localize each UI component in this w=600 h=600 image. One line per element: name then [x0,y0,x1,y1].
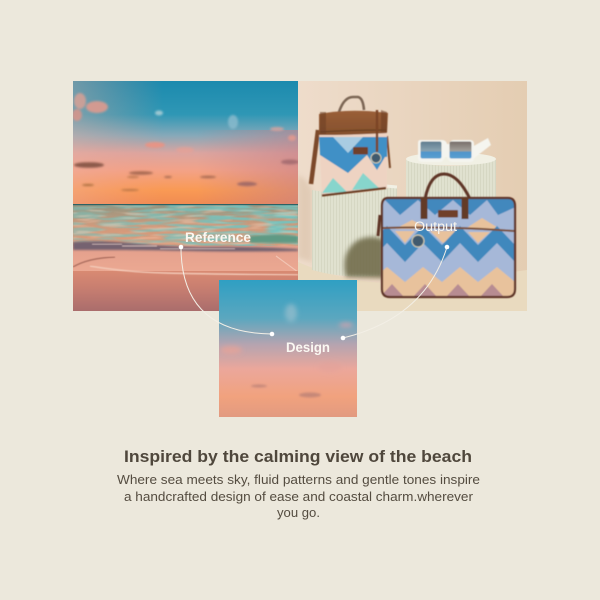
pedestal: right [406,154,496,197]
panel: design swatch [219,280,357,417]
connector: reference to design [179,245,274,336]
panel: reference beach photo [72,81,299,311]
label: Reference: Reference [185,230,251,245]
pedestal: left [312,186,397,278]
panel: output product photo [298,81,533,311]
label: Output: Output [414,219,457,234]
text block: description: you go. [277,506,320,520]
text block: description: Where sea meets sky, fluid patterns and gentle tones inspire [117,473,480,487]
label: Design: Design [286,340,330,355]
bag: large laptop bag [376,172,517,299]
bag: small backpack [311,97,390,196]
icon: sunglasses [418,138,491,162]
text block: description: a handcrafted design of ease and coastal charm.wherever [124,490,473,504]
title: Inspired by the calming view of the beach [124,447,472,466]
connector: output to design [341,245,449,340]
text block: description [117,473,480,520]
